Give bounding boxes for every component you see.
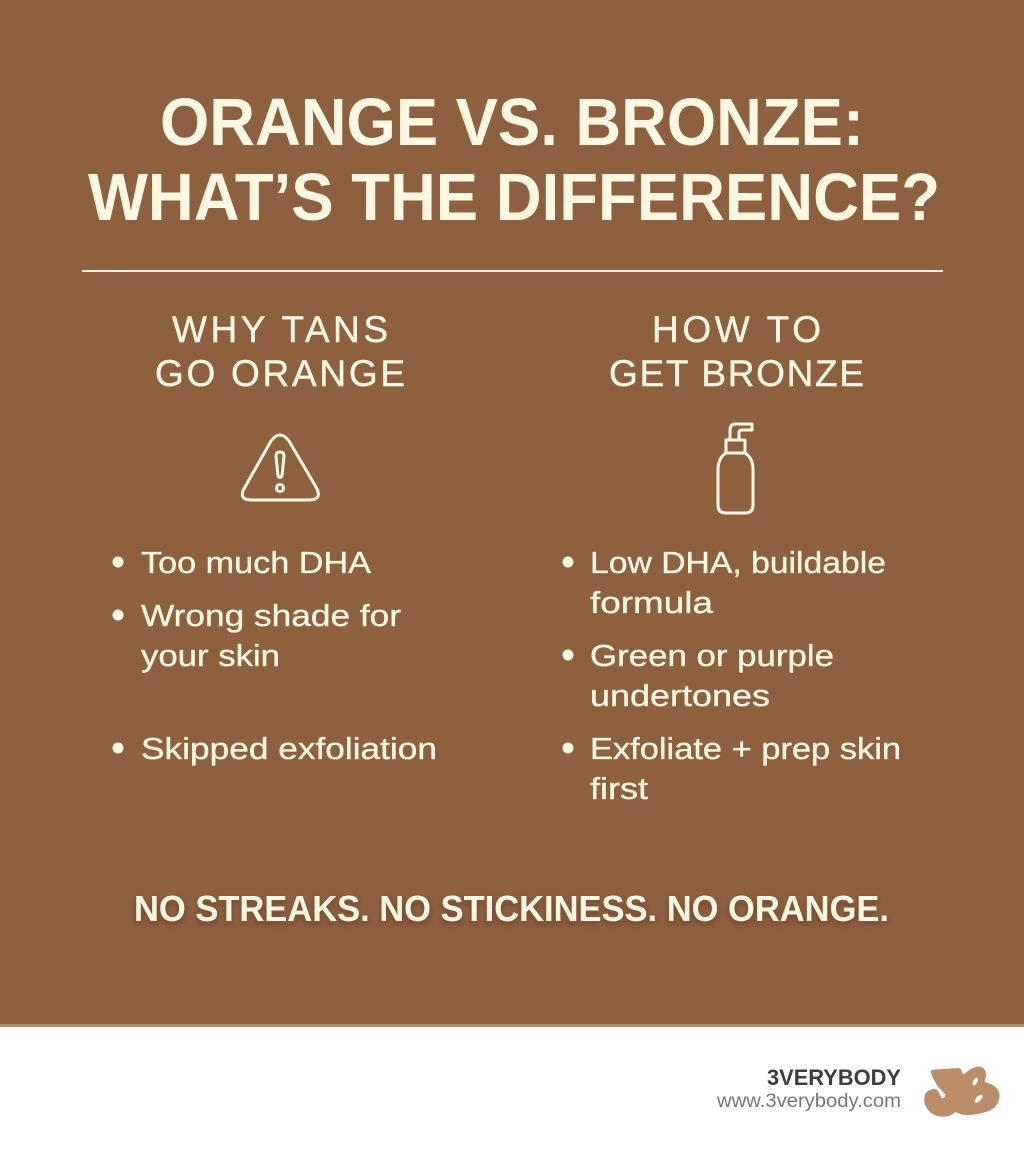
title: WHAT’S THE DIFFERENCE? — [88, 160, 940, 235]
heading: how to get bronze: GET BRONZE — [609, 353, 864, 394]
brand name: 3VERYBODY — [767, 1065, 901, 1090]
bullet list: solutions: Low DHA, buildable — [590, 545, 886, 580]
title — [88, 85, 940, 235]
bullet list: solutions — [562, 545, 901, 806]
tagline: NO STREAKS. NO STICKINESS. NO ORANGE. — [134, 888, 889, 929]
heading: why tans go orange — [155, 309, 405, 394]
heading: why tans go orange: GO ORANGE — [155, 353, 405, 394]
panel: how to get bronze — [562, 309, 901, 806]
bullet list: solutions: formula — [590, 585, 714, 620]
bullet list: solutions: Green or purple — [590, 638, 834, 673]
footer band — [0, 1024, 1024, 1154]
logo — [924, 1067, 1000, 1117]
bullet list: solutions: undertones — [590, 678, 770, 713]
bullet list: causes: Skipped exfoliation — [141, 731, 437, 766]
bullet list: causes: Wrong shade for — [141, 598, 401, 633]
heading: how to get bronze: HOW TO — [652, 309, 821, 350]
title: ORANGE VS. BRONZE: — [160, 85, 864, 160]
heading: how to get bronze — [609, 309, 864, 394]
icon: warning triangle — [242, 435, 318, 500]
website: www.3verybody.com — [716, 1091, 901, 1112]
bullet list: causes: Too much DHA — [141, 545, 371, 580]
bullet list: causes — [112, 545, 437, 766]
bullet list: causes: your skin — [141, 638, 280, 673]
panel: why tans go orange — [112, 309, 437, 766]
icon: pump bottle — [718, 424, 753, 513]
bullet list: solutions: Exfoliate + prep skin — [590, 731, 901, 766]
heading: why tans go orange: WHY TANS — [172, 309, 388, 350]
bullet list: solutions: first — [590, 771, 648, 806]
